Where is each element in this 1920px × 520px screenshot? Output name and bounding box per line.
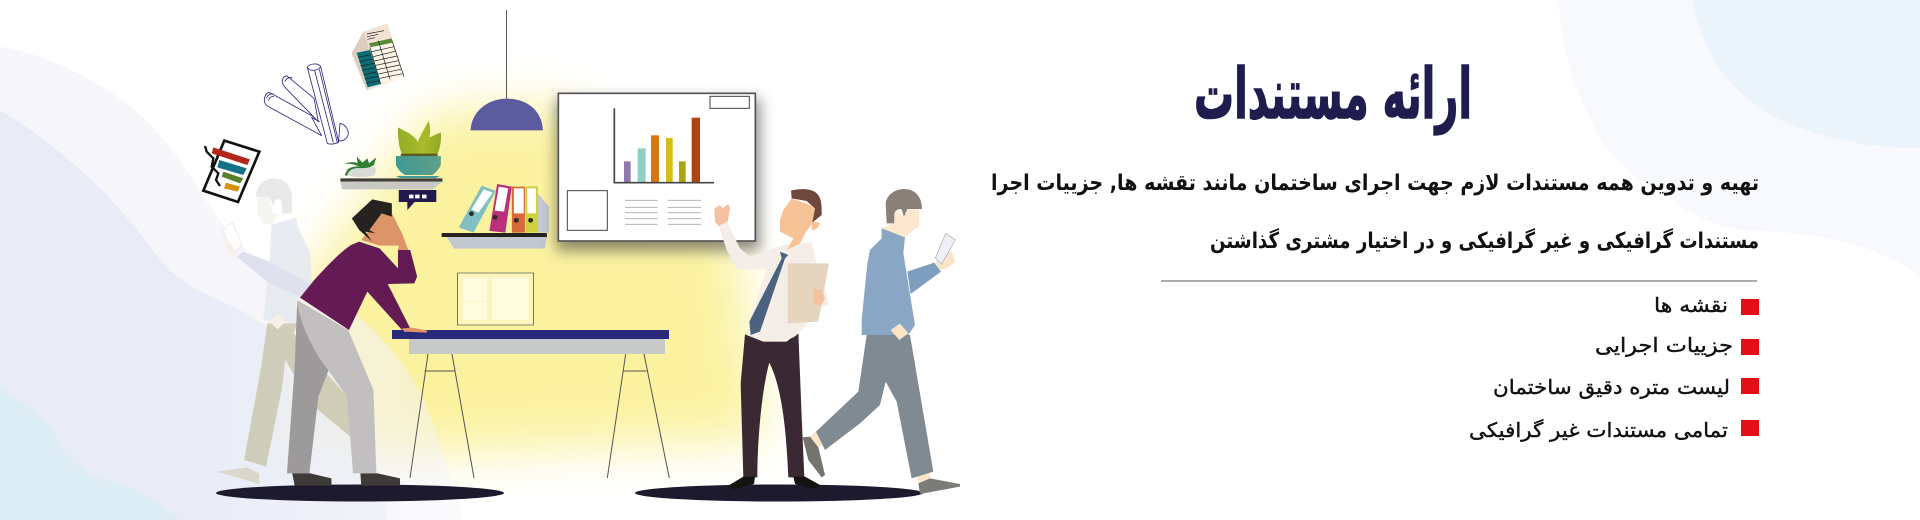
whiteboard with bar chart [558,93,755,241]
bullet 1 [1654,293,1759,317]
thinking man [287,199,427,486]
raised hand [714,204,730,226]
upper shelf [340,178,442,189]
background: inner left wave [0,111,387,520]
bar chart [614,108,714,183]
front shoe [918,478,960,494]
floor shadow right [635,484,923,502]
yellow light glow [250,105,765,455]
divider line [1161,280,1757,282]
pocket hand [891,323,908,340]
back shoe [803,437,825,477]
arm [907,263,941,294]
walking man with phone [803,189,960,494]
hand at chin [398,233,408,250]
background: top-right inner wave [1692,0,1920,148]
faded man in background [217,178,376,484]
illustration group: shelves and lamp [340,10,549,325]
faded man legs [244,323,376,467]
presenting man with tie [714,189,829,489]
text lines [625,200,701,224]
speech bubble [399,190,436,210]
plant in teal pot [396,121,441,178]
board [558,93,755,241]
shoes [728,477,820,489]
faded man head [256,178,292,225]
hanging lamp [471,10,543,130]
faded man hands [224,242,286,329]
faded man phone [222,222,242,255]
face [882,209,919,237]
description text block [991,171,1759,254]
description line 1: تهیه و تدوین همه مستندات لازم جهت اجرای ساختمان مانند تقشه ها, جزییات اجرا [991,171,1759,196]
desk frame [458,273,533,325]
sweater [300,242,417,330]
shirt [718,221,828,341]
bullet 4: تمامی مستندات غیر گرافیکی [1469,418,1728,442]
hair [352,199,392,242]
phone [935,233,955,264]
sweater [862,228,915,335]
table underside [409,339,665,354]
background: outer left wave [0,47,463,520]
hand [935,252,955,270]
hand on folder [813,288,825,305]
table [392,330,669,478]
faded man arm [237,252,312,297]
whiteboard shadow [556,99,760,251]
tie [749,252,788,335]
neck and face [361,213,408,250]
table top [392,330,669,339]
shoes [292,473,400,486]
table legs [410,354,669,478]
description line 2: مستندات گرافیکی و غیر گرافیکی و در اختیار مشتری گذاشتن [1210,227,1759,254]
image placeholder [567,191,607,230]
bullet 1: نقشه ها [1654,293,1728,317]
faded man body [263,217,312,323]
faded man shoe [217,467,259,484]
hair [886,189,922,223]
bullet 2: جزییات اجرایی [1595,333,1733,357]
floating icons [203,23,404,202]
icon: rolled plans [264,64,348,144]
front ankle [917,472,931,483]
floor shadow left [216,484,504,502]
bullet list [1469,293,1759,442]
bullet 3: لیست متره دقیق ساختمان [1493,375,1730,399]
background: bottom-left blue wave [0,387,180,520]
icon: clipboard chart [203,141,259,202]
binders [459,184,549,233]
trousers [287,300,376,473]
background: top-right outer wave [1559,0,1920,277]
title box [710,96,749,108]
back foot [810,432,823,447]
pants [741,332,804,477]
ear [812,222,820,230]
icon: spreadsheet document [352,23,404,91]
title: ارائه مستندات [1194,53,1472,135]
folder [788,263,829,323]
face and neck [780,198,815,250]
pants [816,335,933,478]
hand on table [402,328,427,333]
hair [791,189,822,223]
small plant [344,157,376,177]
lower shelf [442,233,547,249]
